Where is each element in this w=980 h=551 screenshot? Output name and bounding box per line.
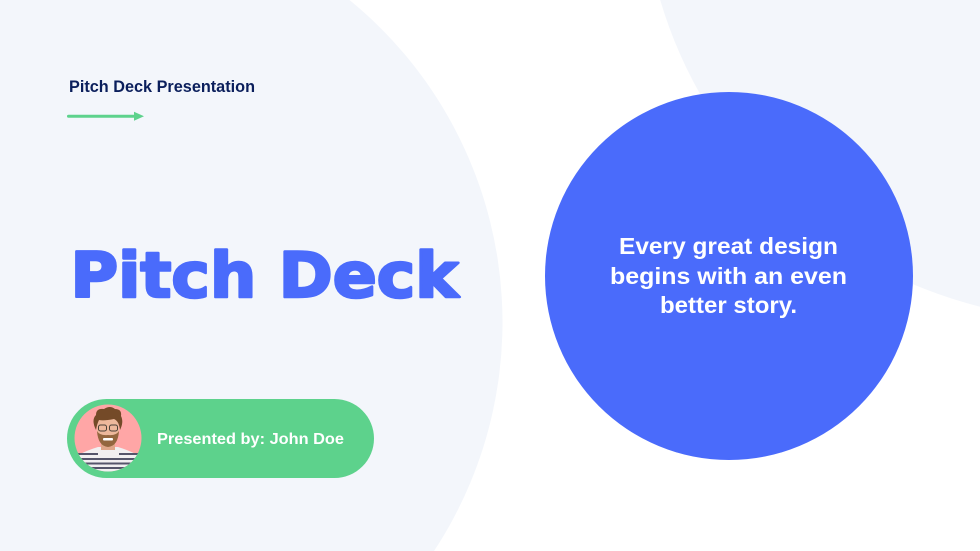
presenter pill (67, 399, 374, 478)
avatar (74, 404, 142, 472)
background circle: top right (660, 0, 980, 307)
quote: better story. (660, 292, 797, 318)
quote: Every great design (619, 233, 838, 259)
eyebrow heading: Pitch Deck Presentation (69, 78, 255, 96)
background circle: left (0, 0, 502, 551)
blue circle (545, 92, 913, 460)
title: Pitch Deck (70, 239, 460, 312)
presenter name: Presented by: John Doe (157, 431, 344, 448)
arrow (67, 112, 144, 121)
quote: begins with an even (610, 263, 847, 289)
quote (610, 233, 847, 318)
